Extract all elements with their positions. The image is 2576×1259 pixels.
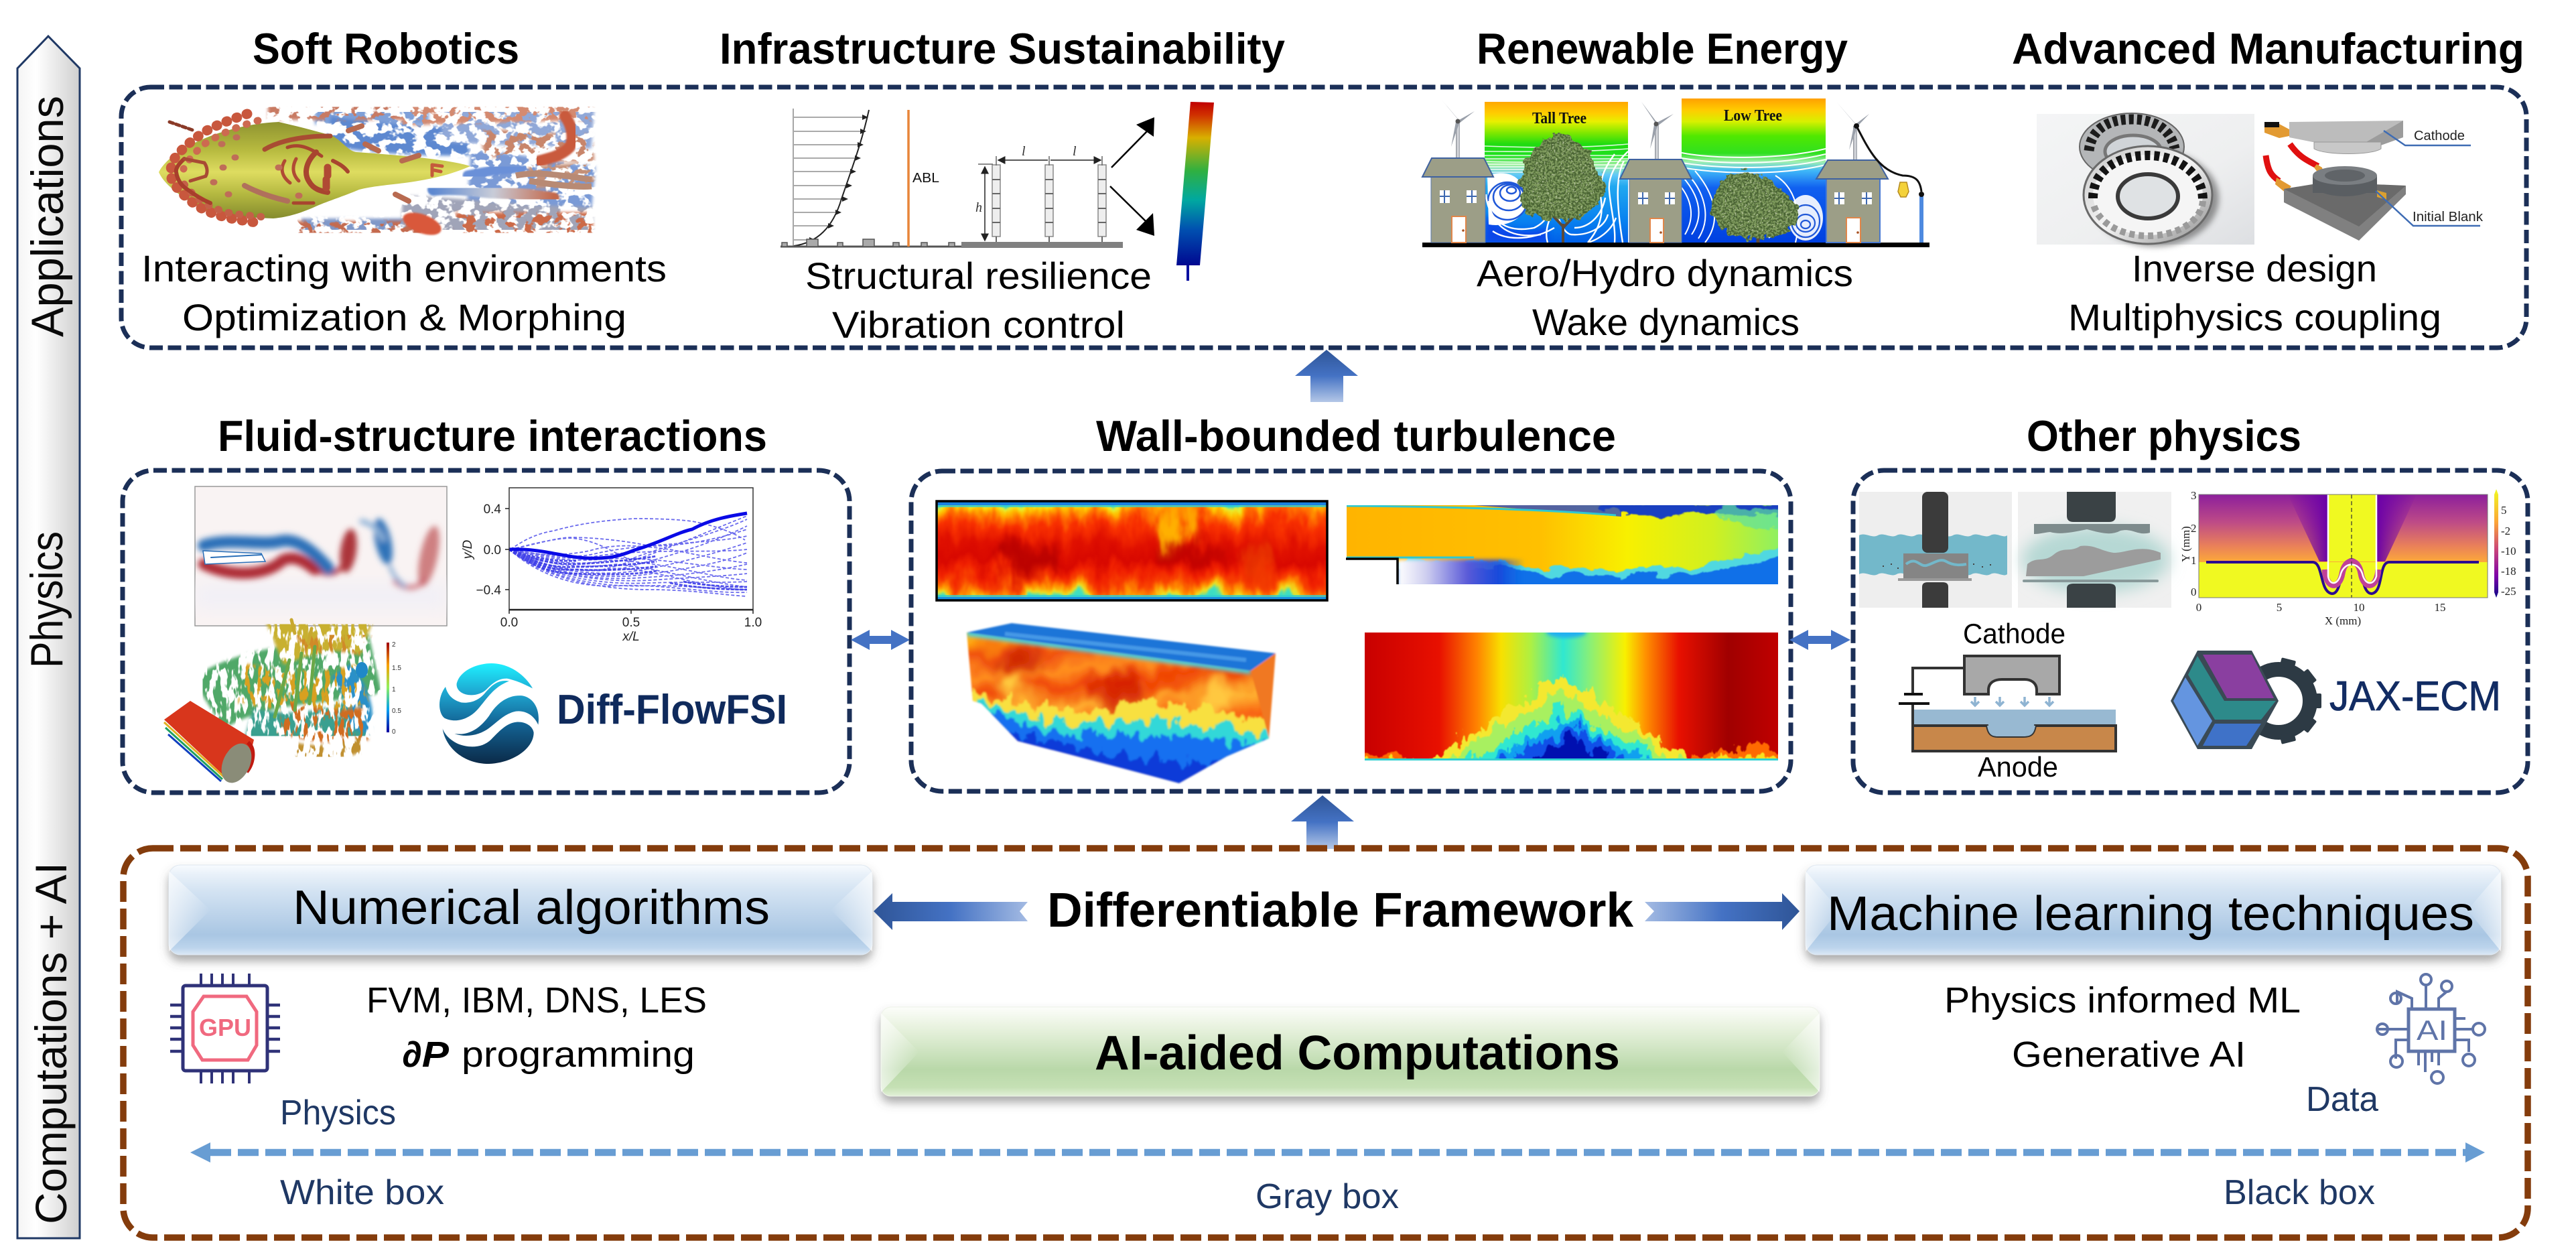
heading: Fluid-structure interactions: Fluid-structure interactions	[218, 411, 767, 460]
colorbar ticks: 0.5	[392, 708, 401, 715]
label: Cathode: Cathode	[2414, 129, 2465, 143]
label: Gray box: Gray box	[1256, 1177, 1399, 1216]
x ticks: 5	[2277, 601, 2282, 614]
axis label: Physics: Physics	[21, 531, 72, 668]
colorbar ticks: -25	[2501, 585, 2516, 598]
colorbar ticks: -18	[2501, 565, 2516, 578]
image: 3D cylinder wake	[164, 620, 401, 788]
panel border: computations	[123, 848, 2528, 1238]
label: AI: AI	[2417, 1014, 2447, 1046]
y label: Y (mm)	[2179, 526, 2192, 562]
label: Physics: Physics	[280, 1094, 396, 1132]
flow field: tall tree	[1485, 102, 1628, 243]
section: applications	[121, 24, 2526, 348]
box: machine learning techniques	[1806, 865, 2501, 955]
label: Numerical algorithms	[293, 881, 770, 935]
heading: Wall-bounded turbulence: Wall-bounded turbulence	[1096, 411, 1616, 460]
chart: beam deflection envelope y/D vs x/L	[461, 488, 762, 644]
image: wind turbines, houses and trees flow fields	[1422, 98, 1929, 247]
image: wind profile over towers: l	[1022, 144, 1026, 159]
text: machine learning methods: Generative AI	[2012, 1035, 2246, 1075]
y ticks: 3	[2191, 489, 2196, 502]
image: vorticity field	[195, 486, 447, 626]
icon: cable, pole and lamp	[1856, 126, 1924, 243]
text: numerical methods	[366, 980, 707, 1075]
colorbar ticks: 1	[392, 686, 396, 693]
icon: AI chip	[2377, 974, 2485, 1083]
diagram: cathode anode machining	[1899, 618, 2116, 783]
arrow: framework to numerical algorithms	[874, 893, 1028, 930]
arrow: framework to machine learning	[1645, 893, 1800, 930]
arrow: physics up to applications	[1295, 350, 1358, 402]
text: soft robotics bullets: Interacting with environments	[141, 247, 667, 289]
text: infrastructure bullets: Structural resilience	[805, 255, 1152, 297]
x ticks: 10	[2353, 601, 2365, 614]
colorbar ticks: 5	[2501, 504, 2507, 517]
image: wind profile over towers	[781, 102, 1214, 281]
label: Initial Blank: Initial Blank	[2413, 210, 2484, 224]
colorbar ticks: 2	[392, 641, 396, 649]
text: numerical methods: ∂P	[402, 1035, 450, 1075]
heading: Soft Robotics: Soft Robotics	[253, 24, 519, 73]
arrow: double arrow fluid-structure and wall-bounded	[851, 630, 910, 650]
image: backward-facing step flow	[1346, 505, 1778, 584]
y axis label: y/D	[461, 539, 475, 560]
panel border: other physics	[1853, 470, 2528, 793]
image: channel flow field	[935, 500, 1329, 602]
heading: Advanced Manufacturing: Advanced Manufacturing	[2012, 24, 2524, 73]
text: soft robotics bullets: Optimization & Morphing	[182, 296, 626, 338]
image: electrochemical machining CAD	[2264, 121, 2484, 241]
text: renewable energy bullets: Aero/Hydro dynamics	[1477, 252, 1853, 294]
logo text: JAX-ECM	[2329, 673, 2501, 720]
text: manufacturing bullets	[2068, 247, 2441, 338]
text: numerical methods: programming	[462, 1035, 695, 1075]
y axis ticks: 0.4	[484, 503, 501, 517]
section: fluid-structure interactions	[123, 411, 850, 793]
text: manufacturing bullets: Inverse design	[2132, 247, 2377, 289]
colorbar ticks: -10	[2501, 545, 2516, 557]
label: Low Tree: Low Tree	[1724, 107, 1782, 125]
label: Tall Tree: Tall Tree	[1532, 110, 1586, 127]
icon: ground line	[1422, 243, 1929, 247]
arrow: double arrow wall-bounded and other physics	[1789, 630, 1850, 650]
image: wind profile over towers: l	[1073, 144, 1077, 159]
label: GPU: GPU	[199, 1014, 251, 1041]
label: Anode: Anode	[1978, 751, 2058, 783]
x ticks: 0	[2196, 601, 2201, 614]
icon: turbines	[1442, 100, 1869, 160]
arrow: computations up to physics	[1291, 795, 1354, 849]
x ticks: 15	[2435, 601, 2445, 614]
label: ABL: ABL	[912, 171, 939, 186]
x axis label: x/L	[622, 630, 640, 644]
section: wall-bounded turbulence	[911, 411, 1791, 797]
icon: trees	[1519, 132, 1800, 243]
text: numerical methods: FVM, IBM, DNS, LES	[366, 980, 707, 1020]
image: wind profile over towers: h	[975, 200, 982, 215]
heading: Other physics: Other physics	[2027, 411, 2301, 460]
colorbar ticks	[2501, 504, 2516, 598]
text: renewable energy bullets: Wake dynamics	[1532, 301, 1800, 343]
colorbar ticks	[392, 641, 401, 736]
logo: JAX-ECM	[2171, 651, 2501, 749]
label: Machine learning techniques	[1827, 887, 2474, 941]
y axis ticks: −0.4	[476, 584, 501, 598]
x label: X (mm)	[2325, 614, 2361, 627]
logo: Diff-FlowFSI	[439, 663, 787, 764]
image: ECM press in electrolyte	[1859, 492, 2012, 608]
heading: Renewable Energy: Renewable Energy	[1477, 24, 1848, 73]
y axis ticks	[476, 503, 501, 598]
box: numerical algorithms	[169, 865, 872, 955]
section: other physics	[1853, 411, 2528, 793]
text: machine learning methods	[1944, 980, 2301, 1075]
x axis ticks: 0.0	[500, 616, 518, 630]
text: renewable energy bullets	[1477, 252, 1853, 343]
image: gear rings photo	[2037, 113, 2254, 247]
text: manufacturing bullets: Multiphysics coupling	[2068, 296, 2441, 338]
label: Data: Data	[2306, 1080, 2378, 1119]
x axis ticks: 0.5	[622, 616, 640, 630]
panel border: applications	[121, 87, 2526, 348]
icon: houses	[1422, 158, 1888, 243]
panel border: wall-bounded	[911, 471, 1791, 791]
text: infrastructure bullets: Vibration control	[832, 304, 1125, 346]
y axis ticks: 0.0	[484, 543, 501, 557]
x axis ticks: 1.0	[744, 616, 762, 630]
label: AI-aided Computations	[1095, 1026, 1620, 1080]
axis label: Computations + AI: Computations + AI	[26, 862, 76, 1224]
heading: Infrastructure Sustainability: Infrastructure Sustainability	[720, 24, 1285, 73]
heading: Differentiable Framework: Differentiable Framework	[1047, 884, 1634, 937]
arrow: white box to black box spectrum	[190, 1142, 2485, 1163]
axis label: Applications: Applications	[22, 96, 73, 337]
left side arrow: scale axis	[17, 36, 80, 1238]
chart: potential heat map	[2179, 489, 2516, 627]
label: White box: White box	[280, 1173, 444, 1212]
colorbar ticks: -2	[2501, 525, 2510, 537]
label: Black box: Black box	[2224, 1173, 2375, 1212]
logo text: Diff-FlowFSI	[557, 687, 787, 733]
panel border: fluid-structure	[123, 470, 850, 793]
image: soft robotics vortex wake	[159, 111, 593, 239]
colorbar ticks: 1.5	[392, 665, 401, 672]
box: AI-aided computations	[881, 1007, 1820, 1096]
image: velocity field over hill	[1365, 633, 1778, 760]
text: infrastructure bullets	[805, 255, 1152, 346]
icon: GPU chip	[170, 974, 280, 1083]
x ticks	[2196, 601, 2445, 614]
section: computations and AI	[123, 848, 2528, 1238]
text: machine learning methods: Physics informed ML	[1944, 980, 2301, 1020]
flow field: low tree	[1682, 98, 1826, 243]
y ticks: 1	[2191, 554, 2196, 567]
image: 3D turbulence box	[966, 622, 1277, 785]
image: ECM workpiece and tool	[2018, 492, 2171, 608]
label: Cathode: Cathode	[1963, 618, 2065, 649]
y ticks: 0	[2191, 586, 2196, 598]
colorbar ticks: 0	[392, 728, 396, 736]
y ticks	[2191, 489, 2196, 598]
y ticks: 2	[2191, 522, 2196, 535]
text: soft robotics bullets	[141, 247, 667, 338]
x axis ticks	[500, 616, 762, 630]
